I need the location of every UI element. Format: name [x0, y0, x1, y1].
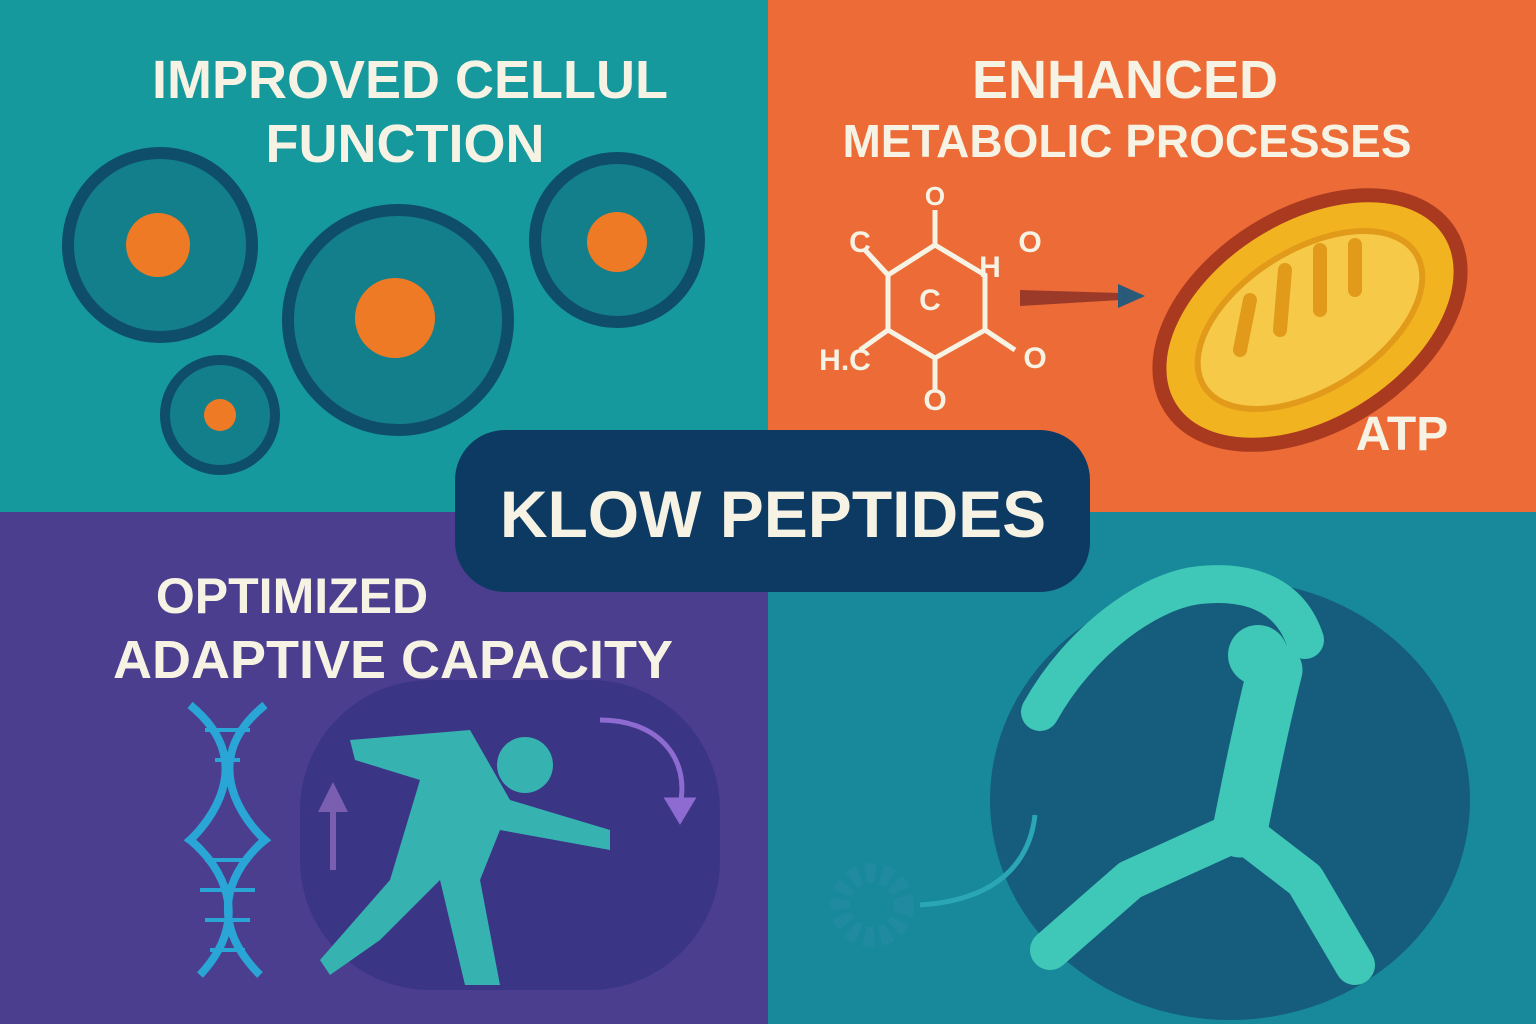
center badge: klow peptides — [455, 430, 1090, 592]
icon: gear — [840, 873, 904, 937]
label: ATP: ATP — [1356, 408, 1448, 461]
molecule labels: O — [1018, 226, 1042, 259]
icon: athlete figure — [1040, 584, 1355, 965]
icon: cell center — [288, 210, 508, 430]
center badge: klow peptides: KLOW PEPTIDES — [500, 477, 1046, 551]
icon: molecule — [860, 210, 1015, 390]
icon: cell right — [535, 158, 699, 322]
arrow: up — [318, 782, 348, 870]
icon: figure — [320, 730, 610, 985]
molecule labels: H.C — [819, 344, 871, 377]
molecule labels: O — [925, 181, 945, 211]
panel: enhanced metabolic processes — [768, 0, 1536, 512]
arrow: curved — [600, 720, 692, 820]
icon: curved arrow — [920, 815, 1035, 905]
icon: cell small — [165, 360, 275, 470]
molecule labels: C — [919, 284, 941, 317]
heading: optimized adaptive capacity — [113, 568, 673, 690]
heading: enhanced metabolic processes: ENHANCED — [972, 50, 1278, 110]
heading: enhanced metabolic processes: METABOLIC PROCESSES — [842, 115, 1412, 167]
icon: mitochondrion — [1114, 144, 1506, 496]
panel: improved cellular function — [0, 0, 768, 512]
molecule labels: O — [1023, 342, 1047, 375]
heading: improved cellul function: FUNCTION — [266, 114, 544, 174]
molecule labels: H — [979, 251, 1001, 284]
heading: improved cellul function: IMPROVED CELLUL — [152, 50, 668, 110]
icon: DNA helix — [190, 705, 265, 975]
icon: cell large left — [68, 153, 252, 337]
molecule labels — [819, 181, 1047, 417]
molecule labels: C — [849, 226, 871, 259]
panel: bottom right figure — [768, 512, 1536, 1024]
molecule labels: O — [923, 384, 947, 417]
heading: optimized adaptive capacity: OPTIMIZED — [156, 568, 428, 624]
heading: optimized adaptive capacity: ADAPTIVE CAPACITY — [113, 630, 673, 690]
heading: improved cellul function — [152, 50, 668, 174]
heading: enhanced metabolic processes — [842, 50, 1412, 167]
arrow: to mitochondrion — [1020, 284, 1145, 308]
panel: optimized adaptive capacity — [0, 512, 768, 1024]
